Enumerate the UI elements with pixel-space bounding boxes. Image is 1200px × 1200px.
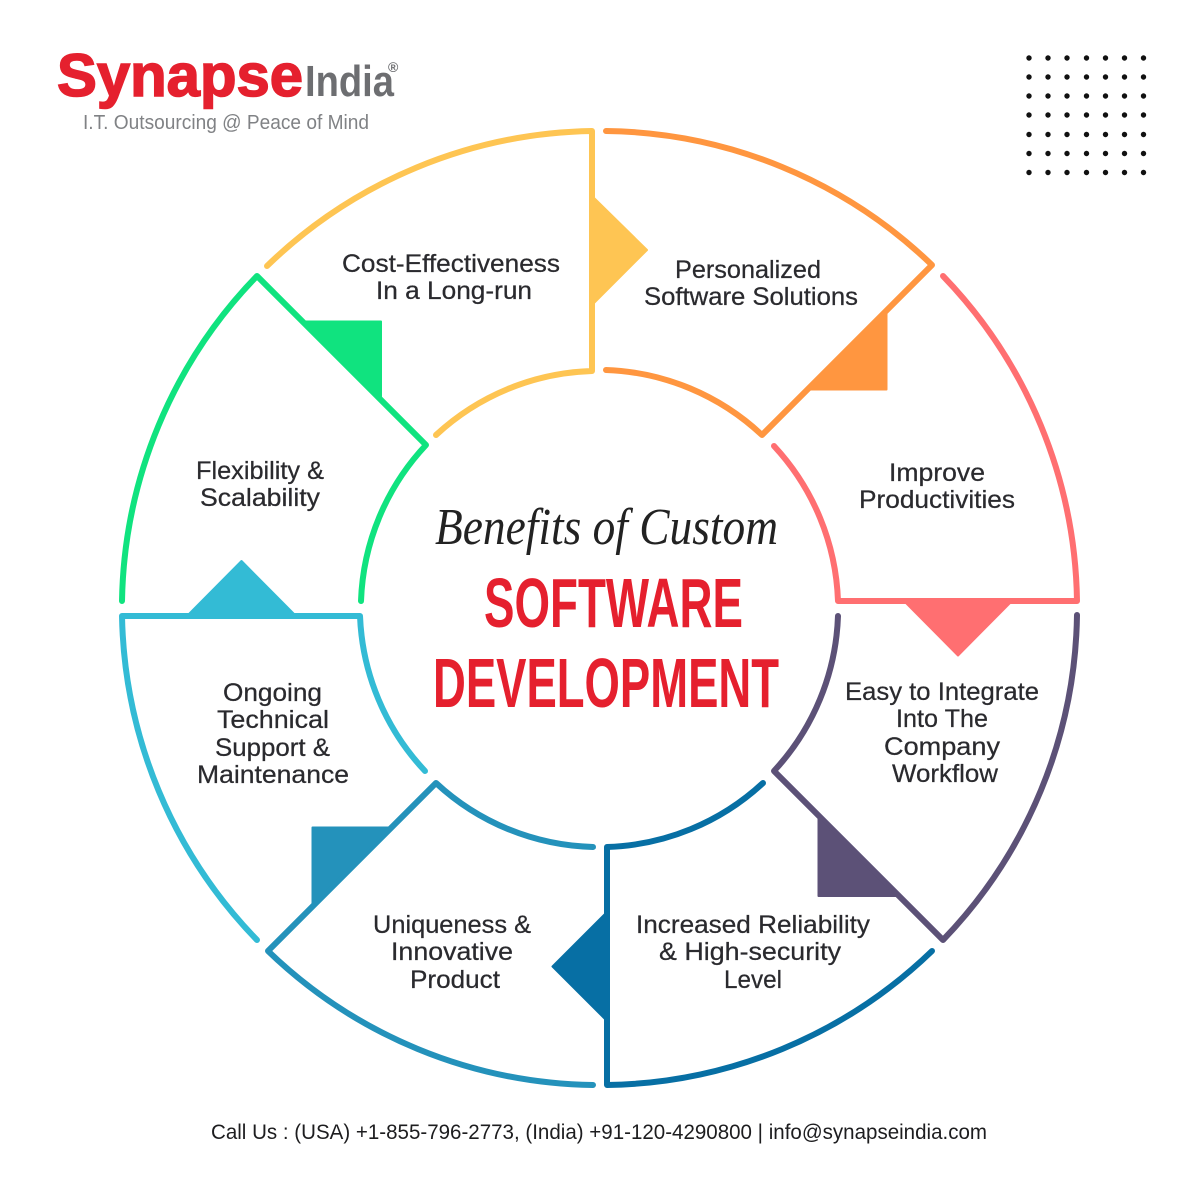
label: increased reliability xyxy=(636,911,871,994)
arrow: orange xyxy=(809,312,886,390)
panel: personalized software (orange) xyxy=(606,131,932,435)
panel: increased reliability (deep blue) xyxy=(552,783,932,1085)
logo: SynapseIndia: I.T. Outsourcing @ Peace of Mind xyxy=(83,112,369,134)
panel: improve productivities (coral) xyxy=(774,276,1077,656)
label: increased reliability: Level xyxy=(724,966,782,994)
label: ongoing support: Technical xyxy=(217,706,329,734)
label: uniqueness xyxy=(373,911,531,994)
footer contact line: Call Us : (USA) +1-855-796-2773, (India) +91-120-4290800 | info@synapseindia.com xyxy=(211,1121,987,1144)
arrow: coral xyxy=(904,601,1012,656)
label: easy to integrate: Company xyxy=(884,733,1001,761)
label: personalized software: Personalized xyxy=(675,256,821,284)
label: cost-effectiveness: In a Long-run xyxy=(376,277,532,305)
label: uniqueness: Product xyxy=(410,966,500,994)
label: personalized software xyxy=(644,256,858,311)
label: improve productivities: Improve xyxy=(889,459,985,487)
label: ongoing support: Ongoing xyxy=(223,679,322,707)
label: uniqueness: Uniqueness & xyxy=(373,911,531,939)
panel: flexibility (green) xyxy=(122,276,426,601)
arrow: deep blue xyxy=(552,912,607,1021)
label: ongoing support xyxy=(197,679,349,789)
title xyxy=(433,499,779,722)
label: easy to integrate: Workflow xyxy=(892,760,999,788)
logo: SynapseIndia xyxy=(57,42,399,134)
panel: uniqueness (teal blue) xyxy=(268,783,593,1085)
label: flexibility: Flexibility & xyxy=(196,457,324,485)
label: easy to integrate xyxy=(845,678,1039,788)
logo: SynapseIndia: Synapse xyxy=(57,42,303,109)
arrow: green xyxy=(303,322,381,399)
label: increased reliability: & High-security xyxy=(659,938,842,966)
arrow: teal blue xyxy=(312,828,390,905)
label: personalized software: Software Solutions xyxy=(644,283,858,311)
title: SOFTWARE xyxy=(484,564,743,642)
panel: cost-effectiveness (yellow) xyxy=(267,131,647,435)
logo: SynapseIndia: India xyxy=(305,57,394,106)
title: DEVELOPMENT xyxy=(433,644,779,722)
label: easy to integrate: Into The xyxy=(896,705,988,733)
decorative dot grid xyxy=(1026,55,1146,175)
label: ongoing support: Support & xyxy=(215,734,330,762)
logo: SynapseIndia: ® xyxy=(388,59,399,75)
arrow: yellow xyxy=(592,196,647,305)
label: increased reliability: Increased Reliability xyxy=(636,911,871,939)
arrow: cyan xyxy=(187,561,296,616)
label: flexibility xyxy=(196,457,324,512)
title: Benefits of Custom xyxy=(435,499,778,556)
arrow: slate xyxy=(818,818,896,896)
panel: easy to integrate (slate) xyxy=(774,615,1077,940)
label: cost-effectiveness: Cost-Effectiveness xyxy=(342,250,560,278)
label: cost-effectiveness xyxy=(342,250,560,305)
label: improve productivities xyxy=(859,459,1015,514)
panel: ongoing support (cyan) xyxy=(122,561,425,940)
label: ongoing support: Maintenance xyxy=(197,761,349,789)
label: easy to integrate: Easy to Integrate xyxy=(845,678,1039,706)
label: improve productivities: Productivities xyxy=(859,486,1015,514)
label: flexibility: Scalability xyxy=(200,484,321,512)
label: uniqueness: Innovative xyxy=(391,938,513,966)
